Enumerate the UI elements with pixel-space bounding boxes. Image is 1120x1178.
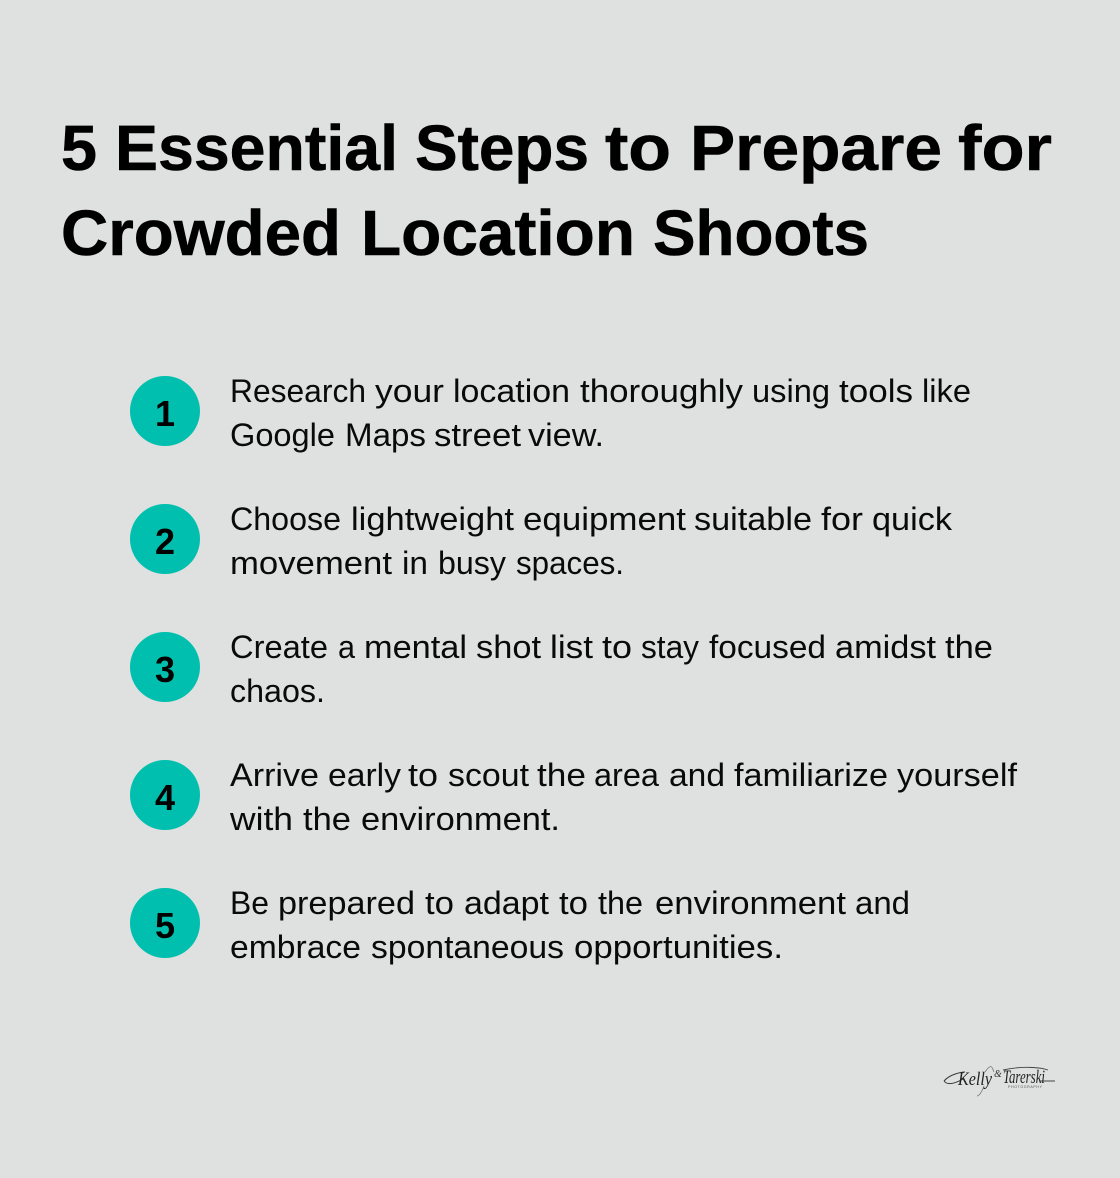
step 3 text: shot [476, 629, 541, 665]
step 3 text: Create [230, 629, 328, 665]
step 2 text: suitable [694, 501, 812, 537]
step 3 text: focused [709, 629, 826, 665]
title [61, 112, 1052, 269]
step 5 text: the [598, 885, 643, 921]
step 4 text: scout [448, 757, 529, 793]
title: to [605, 112, 671, 184]
title: Crowded [61, 197, 341, 269]
title: Location [361, 197, 635, 269]
title: Steps [415, 112, 589, 184]
badge: number 5: 5 [155, 905, 175, 946]
logo: Kelly & Tarerski Photography signature: & [994, 1069, 1002, 1080]
logo: Kelly & Tarerski Photography signature: Tarerski [1003, 1067, 1045, 1088]
step 1 text: Maps [345, 417, 426, 453]
step 1 text [230, 373, 971, 453]
badge: number 4 [130, 760, 200, 830]
badge: number 3: 3 [155, 649, 175, 690]
step 3 text: list [550, 629, 593, 665]
step 1 text: location [453, 373, 570, 409]
title: Prepare [690, 112, 942, 184]
step 4 text: the [537, 757, 586, 793]
step 5 text: spontaneous [371, 929, 564, 965]
step 1 text: street [434, 417, 521, 453]
step 3 text: amidst [835, 629, 936, 665]
logo: Kelly & Tarerski Photography signature [944, 1067, 1055, 1096]
badge: number 1: 1 [155, 393, 175, 434]
step 4 text: early [328, 757, 402, 793]
step 2 text: Choose [230, 501, 341, 537]
step 3 text: a [338, 629, 356, 665]
step 2 text: lightweight [351, 501, 514, 537]
title: Shoots [653, 197, 869, 269]
step 2 text: movement [230, 545, 392, 581]
step 4 text: with [229, 801, 293, 837]
step 5 text: opportunities. [574, 929, 783, 965]
badge: number 2 [130, 504, 200, 574]
step 3 text: chaos. [230, 673, 325, 709]
step 5 text: prepared [278, 885, 415, 921]
step 4 text: yourself [897, 757, 1018, 793]
step 2 text: spaces. [516, 545, 624, 581]
step 5 text: adapt [464, 885, 549, 921]
step 4 text: environment. [361, 801, 560, 837]
badge: number 2: 2 [155, 521, 175, 562]
step 5 text: to [559, 885, 588, 921]
step 2 text: equipment [523, 501, 686, 537]
title: 5 [61, 112, 97, 184]
step 3 text [230, 629, 993, 709]
step 1 text: Google [230, 417, 335, 453]
step 1 text: Research [230, 373, 366, 409]
step 4 text: area [594, 757, 660, 793]
step 5 text: embrace [230, 929, 361, 965]
step 4 text [229, 757, 1018, 837]
step 1 text: using [752, 373, 830, 409]
badge: number 4: 4 [155, 777, 175, 818]
step 3 text: the [945, 629, 993, 665]
step 3 text: mental [364, 629, 467, 665]
step 1 [130, 373, 971, 453]
step 5 text: and [855, 885, 910, 921]
step 5 text: environment [655, 885, 846, 921]
step 2 text [230, 501, 953, 581]
step 4 text: Arrive [230, 757, 319, 793]
step 3 text: stay [641, 629, 700, 665]
badge: number 1 [130, 376, 200, 446]
step 3 text: to [602, 629, 632, 665]
step 3 [130, 629, 993, 709]
step 2 [130, 501, 953, 581]
step 4 [130, 757, 1018, 837]
step 4 text: to [408, 757, 438, 793]
step 5 text: to [425, 885, 454, 921]
title: for [958, 112, 1052, 184]
step 5 text: Be [230, 885, 269, 921]
step 1 text: like [922, 373, 971, 409]
step 1 text: your [375, 373, 444, 409]
logo: Kelly & Tarerski Photography signature: PHOTOGRAPHY [1008, 1085, 1043, 1089]
step 1 text: thoroughly [580, 373, 744, 409]
step 5 [130, 885, 910, 965]
step 1 text: tools [839, 373, 913, 409]
step 2 text: busy [438, 545, 507, 581]
step 2 text: in [402, 545, 428, 581]
logo: Kelly & Tarerski Photography signature: Kelly [957, 1069, 992, 1090]
title: Essential [115, 112, 398, 184]
step 5 text [230, 885, 910, 965]
badge: number 3 [130, 632, 200, 702]
badge: number 5 [130, 888, 200, 958]
step 4 text: the [303, 801, 351, 837]
step 1 text: view. [528, 417, 604, 453]
step 4 text: familiarize [734, 757, 888, 793]
step 2 text: for [821, 501, 863, 537]
step 4 text: and [669, 757, 725, 793]
step 2 text: quick [872, 501, 953, 537]
